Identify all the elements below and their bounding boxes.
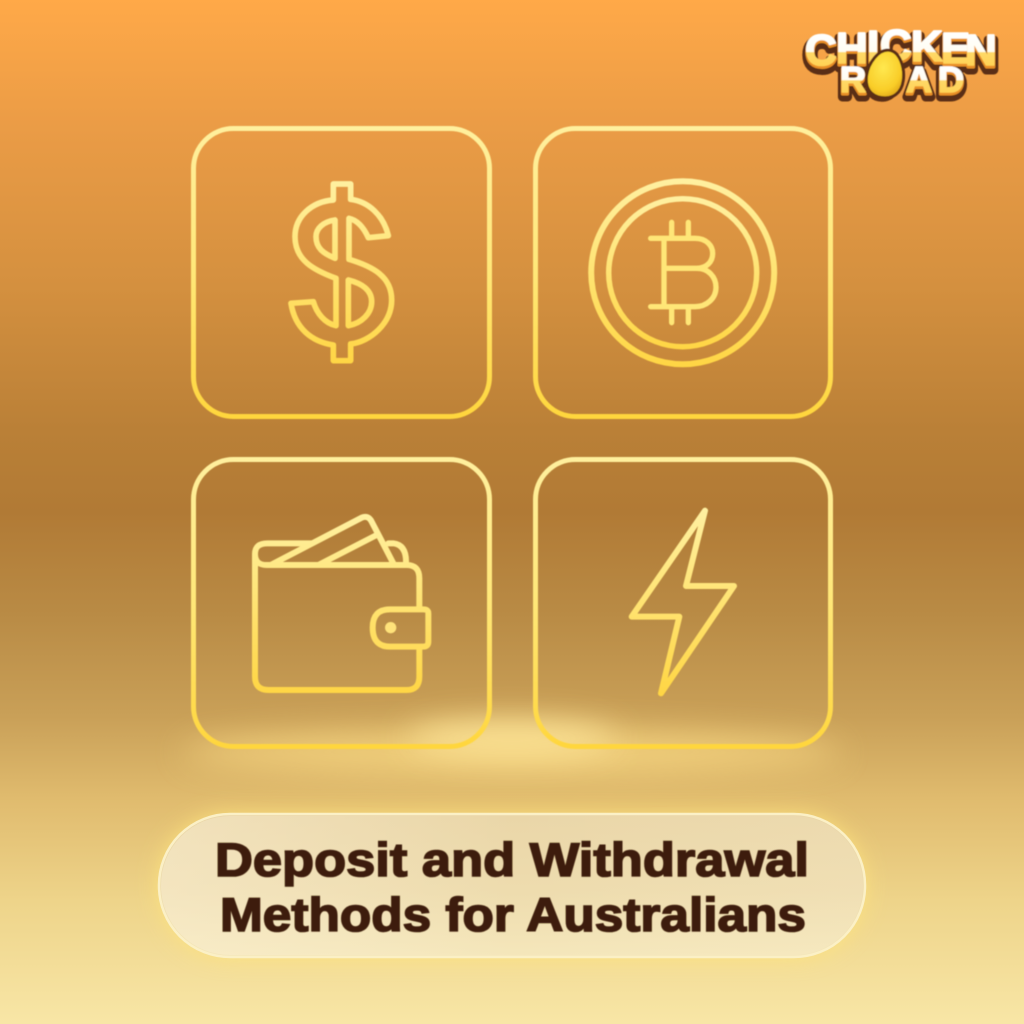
- logo: Chicken Road: [805, 21, 997, 105]
- panel: dollar: [194, 128, 490, 416]
- logo orange edge: CHICKEN: [805, 23, 997, 77]
- logo shadow text: ROAD: [840, 64, 964, 105]
- logo orange edge: [805, 23, 997, 102]
- logo letters: ROAD: [840, 59, 964, 100]
- logo letters: CHICKEN: [805, 21, 997, 75]
- title pill: [158, 813, 866, 958]
- title text: Methods for Australians: [220, 888, 806, 941]
- panel: lightning: [536, 460, 830, 746]
- logo orange edge: ROAD: [840, 61, 964, 102]
- panel: wallet: [194, 460, 490, 746]
- title text: Deposit and Withdrawal: [215, 833, 809, 886]
- logo shadow text: [805, 26, 997, 105]
- title text: [215, 833, 809, 941]
- logo shadow text: CHICKEN: [805, 26, 997, 80]
- logo egg: [864, 48, 907, 100]
- panel: bitcoin: [536, 128, 830, 416]
- logo letters: [805, 21, 997, 100]
- icon: dollar sign: [291, 184, 392, 361]
- icon: lightning bolt: [632, 511, 734, 693]
- icon: bitcoin coin: [591, 181, 774, 364]
- floor glow beneath panels: [182, 720, 842, 774]
- icon: wallet: [255, 517, 428, 690]
